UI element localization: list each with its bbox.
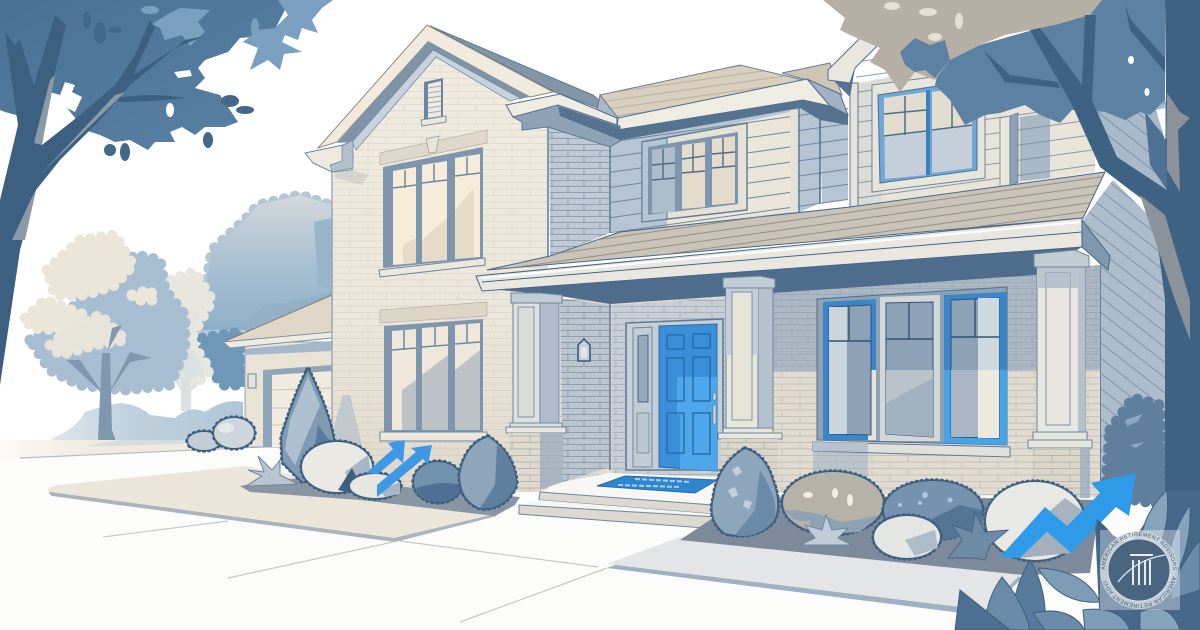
garage roof	[223, 295, 332, 342]
small left shrubs	[188, 418, 254, 450]
large blue-framed window	[813, 287, 1010, 457]
grey wedge under arrow	[1020, 532, 1071, 558]
front tree trunk	[66, 325, 152, 447]
dark blue shrub	[884, 481, 982, 540]
right tree small branches	[983, 5, 1165, 88]
dark round shrub	[414, 462, 462, 502]
shrub by column	[712, 449, 777, 536]
left gable wall	[333, 57, 548, 492]
blue front door	[659, 324, 717, 471]
porch steps and doormat	[519, 473, 717, 529]
white shrub left	[302, 442, 372, 495]
right mulch bed	[680, 495, 1100, 575]
left tree white gap	[174, 70, 192, 78]
landscaping beds and shrubs	[188, 370, 1165, 575]
left tree foliage	[0, 0, 290, 150]
left tree light cluster centre	[152, 8, 210, 46]
upper center siding	[610, 105, 848, 233]
lower step tread	[519, 500, 717, 517]
conical shrub	[282, 370, 334, 482]
far blue tree	[197, 195, 332, 385]
right tree taupe foliage	[823, 0, 1102, 92]
logo column icon	[1118, 555, 1165, 585]
porch center column	[718, 276, 782, 490]
porch roof	[476, 172, 1110, 304]
lower step face	[519, 505, 717, 529]
dormer gable	[828, 28, 880, 97]
front tree	[25, 235, 185, 447]
upper step face	[539, 492, 713, 514]
logo ring	[1100, 531, 1178, 609]
grass clump left	[246, 456, 298, 486]
logo backdrop	[1100, 530, 1180, 610]
concrete joint lines	[103, 521, 607, 622]
right concrete curb	[607, 537, 1023, 616]
house main	[305, 25, 1167, 500]
back beige roof	[782, 63, 842, 95]
shrub shadow on wall	[333, 395, 362, 445]
logo seal: American Retirement Advisors	[1100, 530, 1180, 610]
gable eaves	[305, 25, 617, 185]
right tree sky gaps	[1128, 56, 1165, 140]
lower left window	[380, 319, 487, 441]
blue round shrub	[460, 437, 516, 508]
garage door	[263, 365, 332, 447]
low white shrub	[350, 474, 400, 498]
right tree leaf accents	[884, 2, 963, 41]
landing	[540, 473, 717, 505]
tall shrub at right corner	[1105, 398, 1165, 505]
upper cornice	[610, 79, 848, 142]
porch left column	[506, 293, 566, 490]
beige front path	[48, 466, 497, 542]
ground: driveway and walkway	[0, 440, 1200, 630]
logo circular text: AMERICAN RETIREMENT ADVISORS · AMERICAN RETIREMENT ADVI	[1101, 532, 1177, 608]
pavement	[0, 440, 1200, 630]
gable vent	[421, 78, 446, 126]
pale strip behind tree	[0, 440, 246, 460]
right tree blue foliage	[935, 0, 1165, 125]
white shrub right	[986, 482, 1084, 560]
front tree cream crowns	[25, 235, 155, 355]
lower left window header	[380, 302, 487, 323]
left tree white leaf	[166, 103, 174, 117]
front upper roof	[596, 65, 803, 130]
right tree blue patch in canopy	[900, 38, 950, 78]
doormat	[597, 476, 717, 493]
left tree trunk and branches	[0, 15, 235, 385]
wall lantern	[578, 339, 590, 361]
second-floor left cornice	[506, 94, 620, 147]
left foreground tree	[0, 0, 333, 385]
right tree lower blue wedge	[1145, 112, 1167, 190]
left tree light cluster right	[243, 0, 333, 70]
lower brick wall	[560, 265, 1100, 497]
garage wall	[245, 342, 335, 447]
right dormer wall	[850, 40, 1095, 207]
upper left window header	[380, 130, 487, 165]
beige shrub	[783, 472, 883, 535]
dormer window	[872, 70, 985, 192]
recessed brick wall	[549, 127, 610, 257]
door surround	[626, 319, 723, 470]
background trees	[25, 195, 332, 447]
distant hedge	[52, 401, 243, 440]
right tree gray highlights	[1140, 93, 1190, 340]
small blue growth arrows	[366, 440, 432, 497]
front tree blue mass	[30, 255, 185, 390]
right foreground tree	[823, 0, 1200, 630]
sidelight	[633, 327, 652, 467]
left mulch bed	[240, 478, 520, 516]
foreground leaves	[955, 490, 1200, 630]
large blue growth arrow	[1000, 473, 1136, 558]
right tree trunk	[1030, 0, 1200, 630]
grass clumps right	[800, 515, 852, 545]
small white shrub	[874, 516, 940, 558]
garage	[223, 295, 335, 447]
left tree trunk highlights	[12, 75, 125, 240]
pale back tree	[170, 272, 212, 410]
upper left window	[379, 147, 485, 277]
left tree small branch	[118, 95, 185, 102]
garage light	[248, 374, 256, 388]
left tree leaves	[83, 6, 259, 161]
upper center window	[642, 123, 747, 222]
logo inner disc	[1108, 539, 1170, 601]
porch right column	[1028, 250, 1092, 498]
right side wall siding	[1083, 100, 1167, 500]
